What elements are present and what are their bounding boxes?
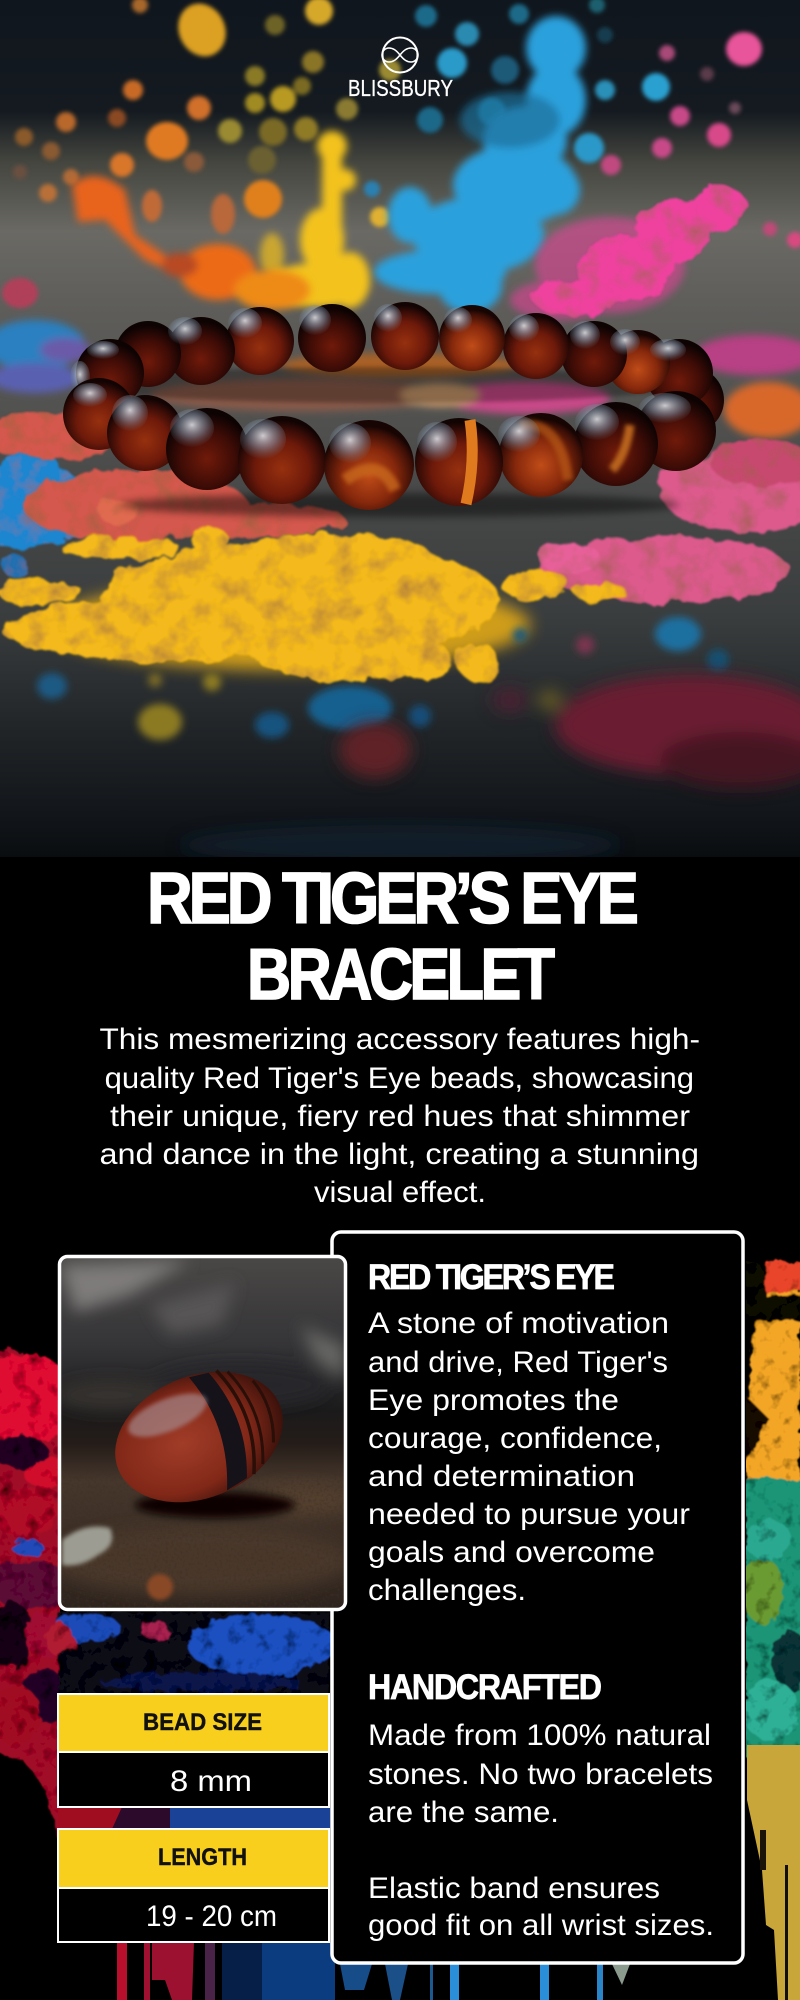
- text: handcrafted description: are the same.: [368, 1796, 559, 1829]
- powder: coral: [0, 411, 345, 541]
- paint drips: bottom: [117, 1942, 630, 2000]
- splash: pink: [510, 217, 685, 320]
- blurred foreground specks: [37, 617, 729, 740]
- blurred foreground maroon powder: [180, 675, 800, 865]
- brand logo: [348, 38, 453, 101]
- powder: yellow pile: [50, 580, 530, 670]
- text: handcrafted description: good fit on all wrist sizes.: [368, 1909, 714, 1942]
- intro paragraph: their unique, fiery red hues that shimmer: [110, 1100, 690, 1133]
- text: stone description: goals and overcome: [368, 1536, 655, 1569]
- text: handcrafted description: Made from 100% natural: [368, 1719, 711, 1752]
- text: stone description: courage, confidence,: [368, 1422, 662, 1455]
- text: handcrafted description: [368, 1719, 714, 1942]
- intro paragraph: This mesmerizing accessory features high-: [100, 1023, 700, 1056]
- bracelet: back beads: [70, 302, 724, 433]
- intro paragraph: and dance in the light, creating a stunning: [100, 1138, 699, 1171]
- paint splash: left and behind tables: [0, 1350, 337, 1860]
- table: length: 19 - 20 cm: [146, 1900, 277, 1933]
- table: bead size: [58, 1694, 329, 1807]
- brand logo: BLISSBURY: [348, 75, 453, 101]
- text: stone description: and determination: [368, 1460, 635, 1493]
- powder: pink right: [540, 438, 800, 603]
- splash: yellow: [260, 131, 370, 308]
- text: stone description: challenges.: [368, 1574, 526, 1607]
- bokeh dots: orange: [13, 0, 282, 234]
- bokeh dots: blue: [364, 0, 670, 197]
- text: handcrafted description: stones. No two bracelets: [368, 1758, 713, 1791]
- bokeh dots: pink: [2, 32, 800, 308]
- text: stone description: needed to pursue your: [368, 1498, 690, 1531]
- splash: orange: [72, 176, 310, 310]
- text: stone description: A stone of motivation: [368, 1307, 669, 1340]
- title: RED TIGER’S EYE: [147, 859, 639, 939]
- table: bead size: BEAD SIZE: [143, 1709, 262, 1736]
- hero photo: bracelet on coloured powder: [0, 0, 800, 865]
- powder: back ring: [0, 320, 800, 438]
- powder: blue left: [0, 451, 78, 579]
- photo: tumbled stone: [50, 1256, 350, 1610]
- paint: strip between tables: [58, 1807, 330, 1829]
- bokeh dots: yellow: [218, 0, 401, 227]
- table: bead size: 8 mm: [170, 1765, 252, 1798]
- title: [147, 859, 639, 1015]
- intro paragraph: quality Red Tiger's Eye beads, showcasing: [105, 1062, 694, 1095]
- heading: handcrafted: HANDCRAFTED: [368, 1669, 602, 1707]
- paint splash: right side: [740, 1262, 800, 2000]
- heading: red tiger's eye: RED TIGER’S EYE: [368, 1259, 615, 1297]
- text: stone description: and drive, Red Tiger's: [368, 1346, 668, 1379]
- panel: description: [332, 1232, 743, 1963]
- stone: [115, 1370, 283, 1502]
- paint drips: right: [747, 1745, 800, 2000]
- text: handcrafted description: Elastic band ensures: [368, 1872, 660, 1905]
- title: BRACELET: [247, 935, 555, 1015]
- text: stone description: Eye promotes the: [368, 1384, 619, 1417]
- bracelet: front beads: [63, 378, 716, 517]
- pebbles: [62, 1526, 173, 1600]
- paint: blue behind tables: [46, 1612, 337, 1694]
- table: length: [58, 1829, 329, 1942]
- intro paragraph: visual effect.: [314, 1176, 486, 1209]
- text: stone description: [368, 1307, 690, 1607]
- table: length: LENGTH: [158, 1844, 247, 1871]
- splash: blue: [374, 16, 586, 313]
- intro paragraph: [100, 1023, 700, 1209]
